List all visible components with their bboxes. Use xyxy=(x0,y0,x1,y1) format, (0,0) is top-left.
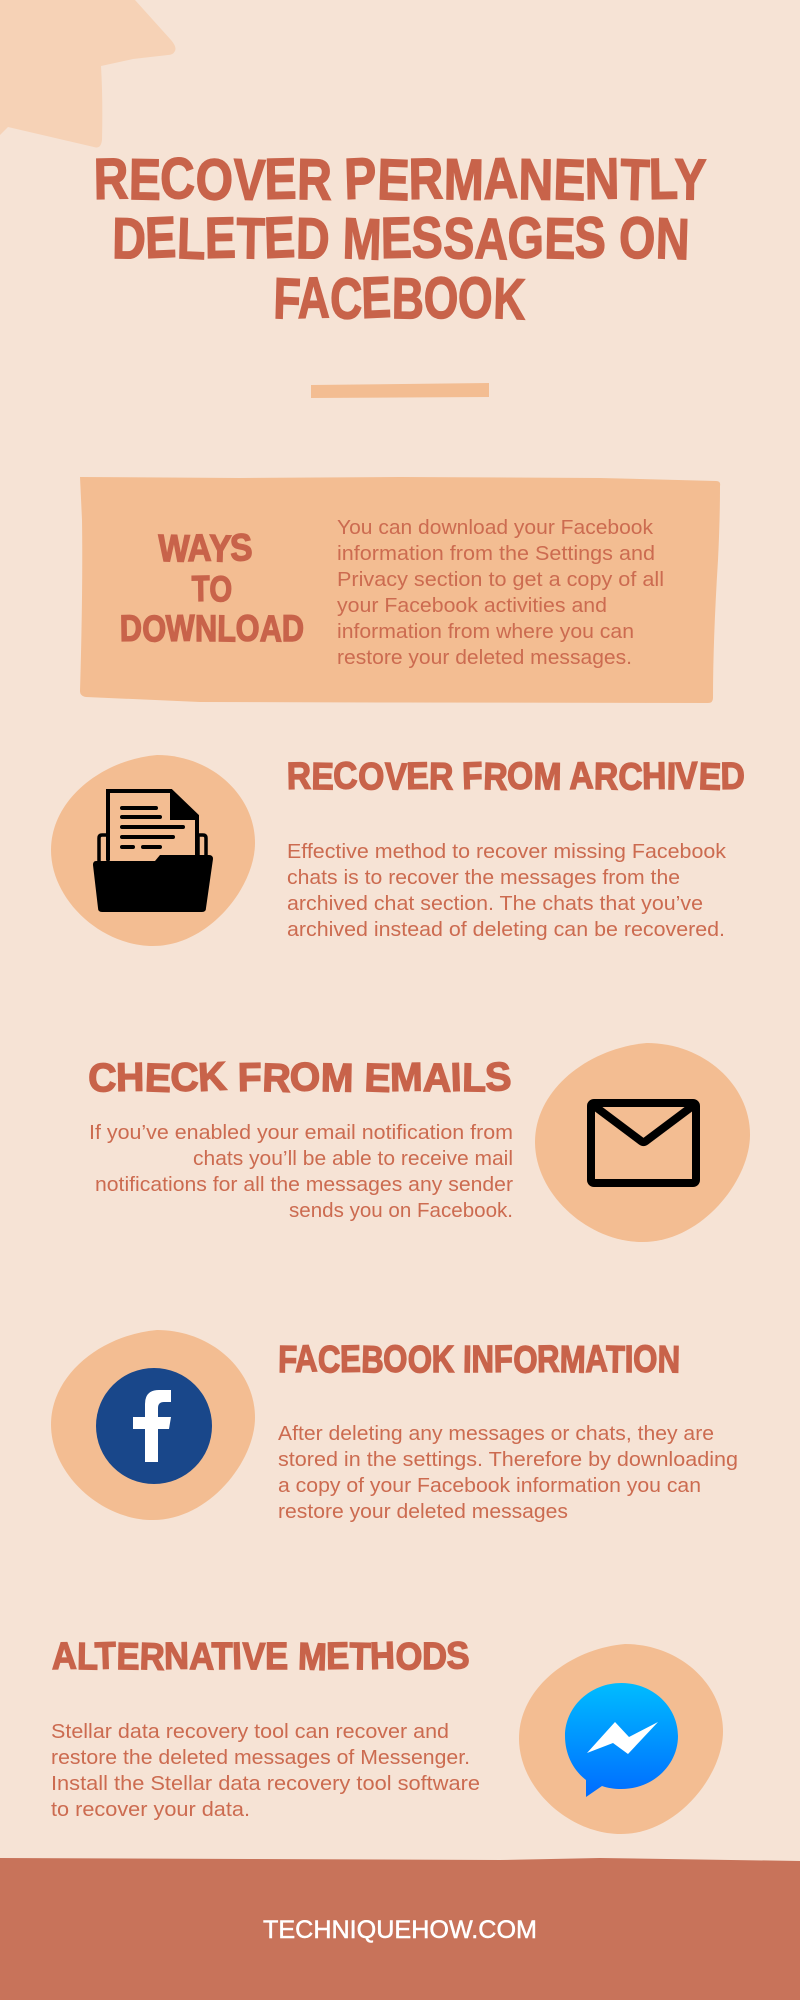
body text: to recover your data. xyxy=(51,1798,250,1821)
heading: RECOVER FROM ARCHIVED xyxy=(286,755,745,799)
panel background xyxy=(80,477,720,703)
icon: folder with document xyxy=(93,789,213,912)
body text xyxy=(51,1720,480,1821)
section: alternative methods xyxy=(51,1635,723,1834)
blob background xyxy=(51,1330,255,1520)
panel heading: TO xyxy=(191,568,233,609)
body text xyxy=(278,1422,738,1523)
body text: Install the Stellar data recovery tool software xyxy=(51,1772,480,1795)
body text: If you’ve enabled your email notification from xyxy=(89,1121,513,1144)
body text: archived instead of deleting can be recovered. xyxy=(287,918,725,941)
icon: messenger logo xyxy=(565,1683,678,1797)
body text: archived chat section. The chats that you’ve xyxy=(287,892,703,915)
panel heading xyxy=(119,527,304,649)
heading: ALTERNATIVE METHODS xyxy=(51,1635,470,1679)
blob background xyxy=(535,1043,750,1242)
footer text: TECHNIQUEHOW.COM xyxy=(263,1916,537,1944)
icon: facebook logo xyxy=(96,1368,212,1484)
title xyxy=(93,146,707,332)
body text: sends you on Facebook. xyxy=(289,1199,513,1222)
decorative star corner xyxy=(0,0,176,148)
panel text: You can download your Facebook xyxy=(337,516,654,539)
panel text: Privacy section to get a copy of all xyxy=(337,568,664,591)
body text: restore your deleted messages xyxy=(278,1500,568,1523)
body text: Stellar data recovery tool can recover and xyxy=(51,1720,449,1743)
title: FACEBOOK xyxy=(273,265,527,332)
footer band xyxy=(0,1858,800,2000)
icon: envelope xyxy=(591,1103,696,1183)
body text: Effective method to recover missing Facebook xyxy=(287,840,727,863)
section: check from emails xyxy=(88,1043,750,1242)
panel text: information from where you can xyxy=(337,620,634,643)
panel: ways to download xyxy=(80,477,720,703)
title underline bar xyxy=(311,383,489,398)
body text: stored in the settings. Therefore by downloading xyxy=(278,1448,738,1471)
body text xyxy=(89,1121,513,1222)
body text: chats you’ll be able to receive mail xyxy=(193,1147,513,1170)
title: DELETED MESSAGES ON xyxy=(112,205,691,272)
blob background xyxy=(51,755,255,946)
body text: restore the deleted messages of Messenger. xyxy=(51,1746,470,1769)
panel heading: WAYS xyxy=(158,527,253,571)
section: facebook information xyxy=(51,1330,738,1523)
panel text xyxy=(337,516,664,669)
blob background xyxy=(519,1644,723,1834)
body text xyxy=(287,840,727,941)
body text: After deleting any messages or chats, they are xyxy=(278,1422,714,1445)
heading: CHECK FROM EMAILS xyxy=(88,1055,512,1101)
panel text: restore your deleted messages. xyxy=(337,646,632,669)
panel heading: DOWNLOAD xyxy=(119,607,304,649)
body text: notifications for all the messages any sender xyxy=(95,1173,513,1196)
body text: chats is to recover the messages from the xyxy=(287,866,680,889)
title: RECOVER PERMANENTLY xyxy=(93,146,707,213)
heading: FACEBOOK INFORMATION xyxy=(278,1338,681,1382)
panel text: information from the Settings and xyxy=(337,542,655,565)
section: recover from archived xyxy=(51,755,745,946)
body text: a copy of your Facebook information you can xyxy=(278,1474,701,1497)
panel text: your Facebook activities and xyxy=(337,594,607,617)
